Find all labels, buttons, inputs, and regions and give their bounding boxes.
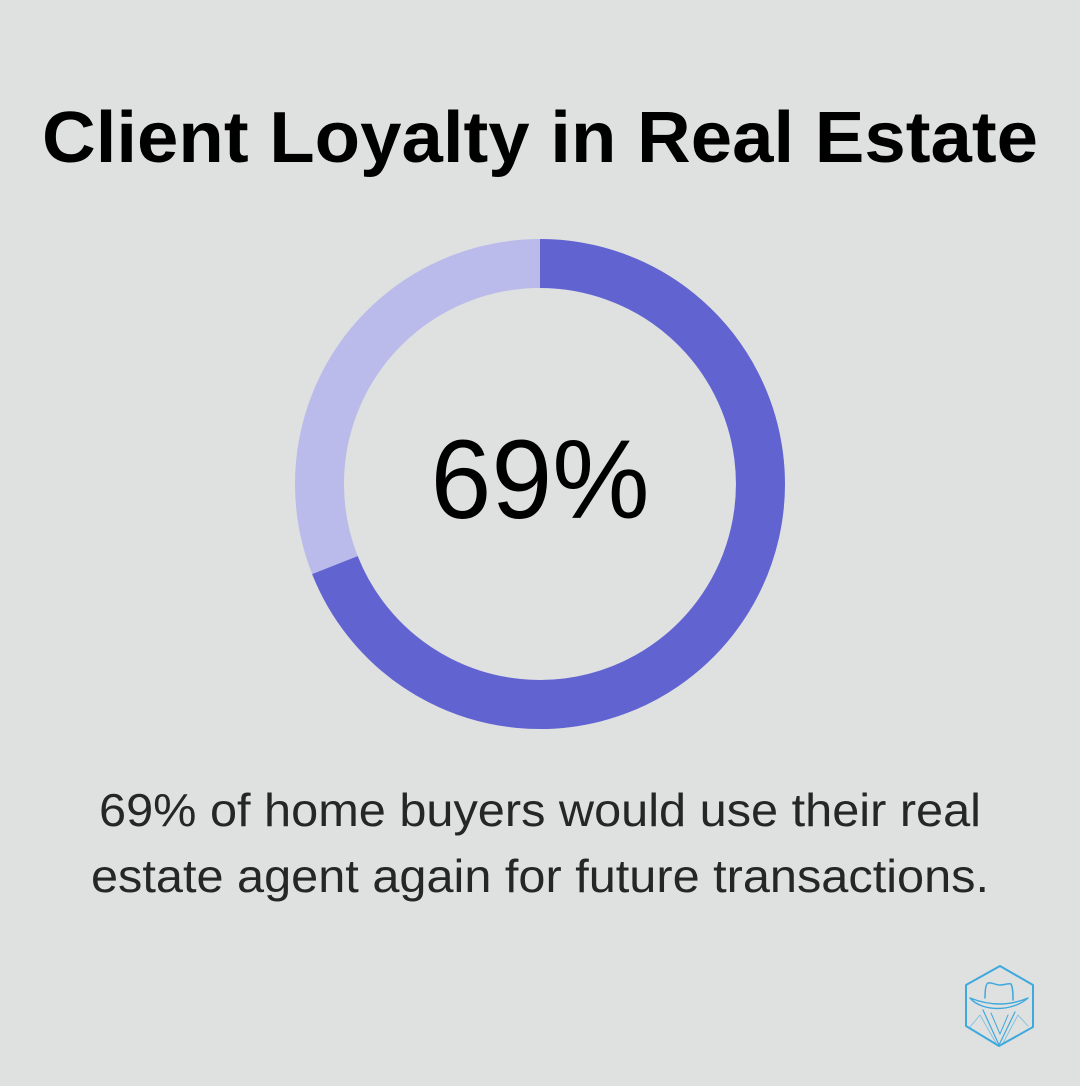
description text: 69% of home buyers would use their real <box>99 784 981 836</box>
title: Client Loyalty in Real Estate <box>42 98 1038 178</box>
donut arc: 69% <box>335 264 760 704</box>
description text: estate agent again for future transactions. <box>91 850 989 902</box>
description text <box>91 784 989 902</box>
donut track: remaining 31% <box>320 264 760 704</box>
donut chart <box>320 264 760 704</box>
center value: 69% <box>430 417 650 542</box>
icon: logo with hat in hexagon <box>966 966 1033 1046</box>
